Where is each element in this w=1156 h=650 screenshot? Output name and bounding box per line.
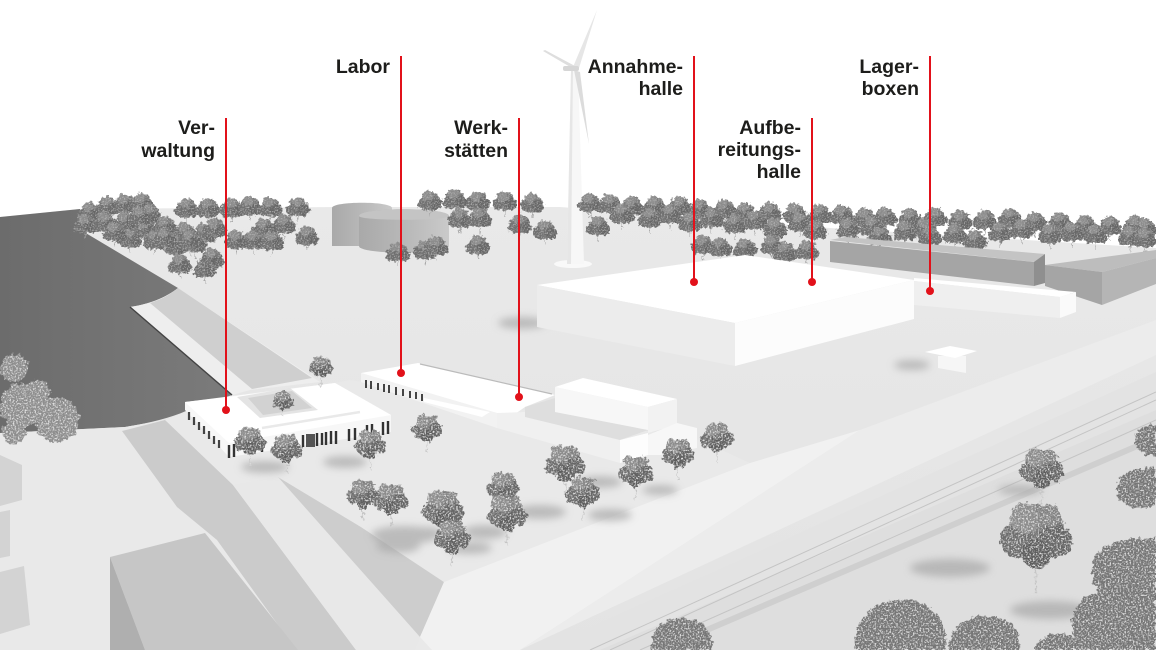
gray hall right [1045,250,1156,305]
label: Lagerboxen: boxen [862,78,919,100]
label: Lagerboxen [859,56,934,295]
label: Verwaltung: waltung [140,140,215,162]
quay wall and embankment [130,288,320,395]
label: Aufbereitungshalle [718,117,816,286]
gray hall behind [830,237,1045,286]
label: Werkstätten: Werk- [454,117,508,139]
label: Verwaltung: Ver- [178,117,215,139]
building: Lagerboxen [914,278,1076,318]
label: Aufbereitungshalle: halle [757,161,801,183]
wind turbine [543,10,597,268]
plaza and foreground trees [0,354,1156,650]
label: Aufbereitungshalle: Aufbe- [739,117,801,139]
lower left ground [0,412,440,650]
label: Labor [336,56,405,377]
storage tanks [332,203,449,253]
label: Annahmehalle: halle [639,78,683,100]
building: Labor and Werkstätten [361,363,697,463]
tree belt on horizon [73,189,1156,283]
slopes and plaza [122,320,1156,650]
label: Labor: Labor [336,56,390,78]
water basin [0,209,232,433]
label: Werkstätten: stätten [444,140,508,162]
ground plateau [0,207,1156,650]
small hut [925,346,977,373]
ground shadows [241,317,1090,619]
label: Verwaltung [140,117,230,414]
label: Annahmehalle [588,56,698,286]
label: Annahmehalle: Annahme- [588,56,683,78]
label: Aufbereitungshalle: reitungs- [718,139,801,161]
bottom left building [110,533,298,650]
label: Lagerboxen: Lager- [859,56,919,78]
small buildings at left edge [0,455,30,634]
building: Verwaltung [185,383,391,458]
building: Annahme and Aufbereitung hall [537,255,914,366]
label: Werkstätten [444,117,523,401]
